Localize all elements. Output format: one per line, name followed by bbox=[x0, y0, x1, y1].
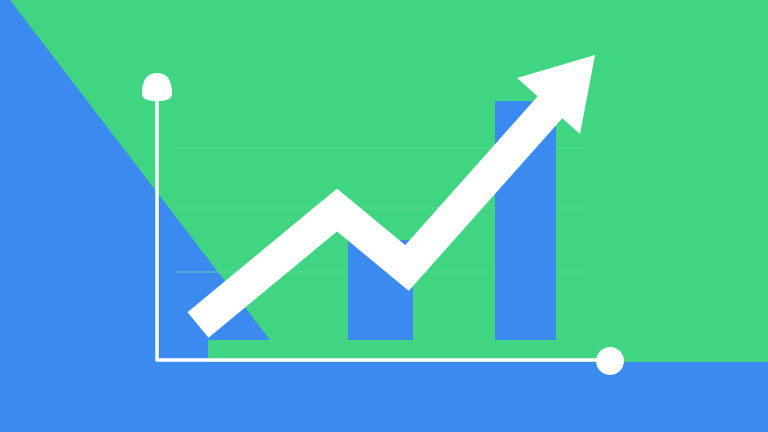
bar 2 bbox=[348, 240, 413, 340]
gridlines bbox=[176, 148, 586, 272]
bar 3 bbox=[495, 101, 556, 340]
axes bbox=[142, 73, 624, 375]
trend arrow bbox=[198, 55, 595, 325]
